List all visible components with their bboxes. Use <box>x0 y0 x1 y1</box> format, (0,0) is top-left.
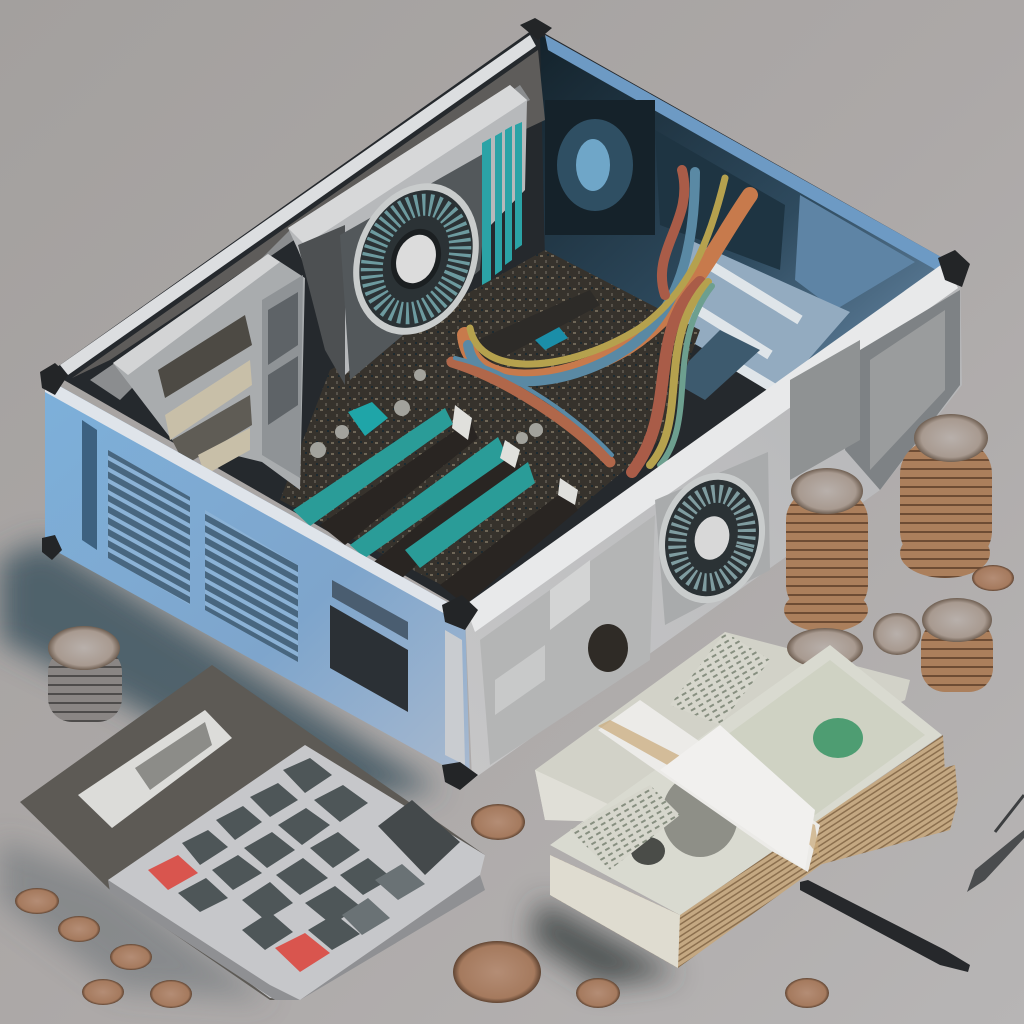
shadow: case and calculator <box>0 540 680 1000</box>
motherboard <box>280 250 700 600</box>
inner left rail <box>72 50 545 378</box>
top bill <box>550 645 942 915</box>
drive bay cage <box>113 254 305 490</box>
computer case <box>40 18 970 790</box>
front-left blue panel <box>45 378 470 780</box>
front cash stack <box>550 645 945 968</box>
icon: rear case fan <box>645 452 779 625</box>
chips on board <box>310 290 600 458</box>
ribbon cables <box>452 170 750 472</box>
upright teal memory sticks <box>482 122 522 285</box>
memory modules on board <box>293 405 578 605</box>
calculator <box>20 665 485 1000</box>
icon: graphics card fan <box>331 164 501 354</box>
back wall cooler fan <box>545 100 655 235</box>
front-right silver panel <box>465 262 962 780</box>
coin stack: right tall <box>900 414 992 578</box>
loose coins <box>15 565 1014 1008</box>
second pen at right edge <box>967 795 1024 892</box>
pen <box>800 880 970 972</box>
case interior floor <box>50 28 955 610</box>
paper band <box>598 700 820 872</box>
calculator red keys <box>148 855 198 890</box>
back cash stack <box>535 628 958 870</box>
back wall blue panel <box>540 35 950 400</box>
coin stack: small right <box>921 598 993 692</box>
calculator screen <box>78 710 232 828</box>
graphics card with fan <box>288 85 527 385</box>
coin stack: left <box>48 626 122 722</box>
calculator keys <box>178 758 460 950</box>
case corner brackets <box>40 18 970 790</box>
stack edges <box>550 735 945 968</box>
coin stack: middle <box>784 468 868 632</box>
calculator body <box>20 665 485 1000</box>
